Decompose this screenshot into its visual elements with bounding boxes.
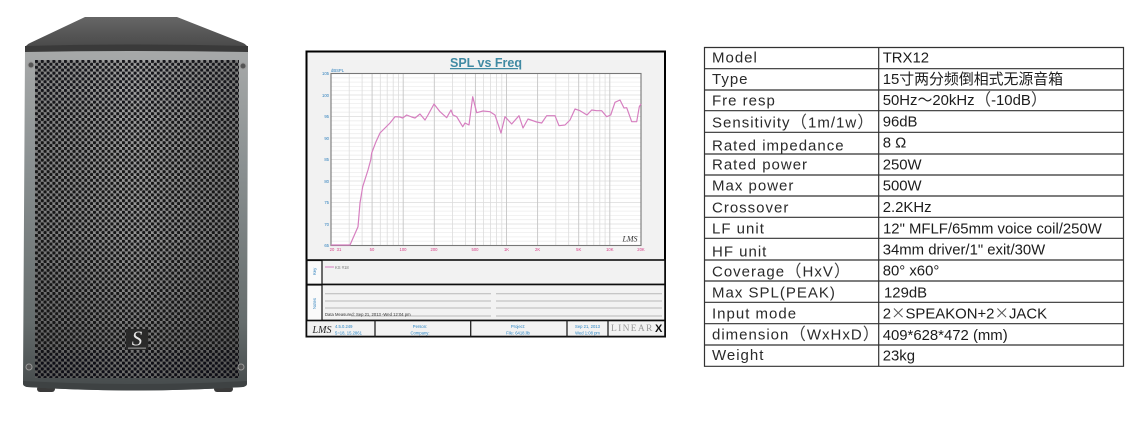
row: frequency response: Fre resp	[712, 93, 776, 110]
row: model: Model	[712, 50, 758, 67]
row: max power: 500W	[883, 179, 922, 195]
row: input mode: Input mode	[712, 305, 797, 322]
y axis labels: 70	[324, 222, 330, 227]
key section: Key	[312, 267, 317, 275]
y axis labels: 85	[324, 157, 330, 162]
y axis labels	[322, 71, 330, 248]
panel: speaker photo	[23, 17, 248, 392]
footer info bar: Company:	[410, 330, 430, 336]
speaker feet	[37, 386, 233, 392]
footer info bar: X	[655, 323, 663, 335]
panel: specification table	[704, 48, 1124, 366]
row: rated impedance	[712, 135, 906, 155]
row: LF unit: 12" MFLF/65mm voice coil/250W	[883, 221, 1102, 237]
row: rated power: Rated power	[712, 156, 808, 173]
y axis labels: 90	[324, 136, 330, 141]
footer info bar: Wed 1:08 pm	[575, 330, 600, 336]
footer info bar: File: 6418.lib	[506, 330, 531, 336]
row: dimension: dimension（WxHxD）	[712, 324, 880, 343]
x axis labels: 200	[430, 247, 438, 252]
x axis labels: 20	[330, 247, 335, 252]
row: model: TRX12	[883, 50, 929, 66]
row: max SPL: 129dB	[884, 285, 927, 301]
row: rated power	[712, 156, 922, 173]
row: crossover	[712, 199, 932, 216]
row: rated impedance: Rated impedance	[712, 138, 845, 155]
row: crossover: 2.2KHz	[883, 200, 932, 216]
row: LF unit: LF unit	[712, 220, 765, 237]
row: rated power: 250W	[883, 157, 922, 173]
row: crossover: Crossover	[712, 199, 789, 216]
row: coverage: 80° x60°	[883, 264, 939, 280]
footer info bar: Person:	[413, 324, 427, 329]
x axis labels: 5K	[576, 247, 581, 252]
row: input mode	[712, 302, 1047, 323]
footer info bar: 4.5.0.249	[335, 324, 353, 329]
bottom band	[23, 381, 247, 390]
metal grille	[35, 60, 239, 378]
panel: SPL vs Freq chart	[306, 52, 665, 336]
frequency response curve	[331, 97, 641, 245]
y axis labels: 80	[324, 179, 330, 184]
key section: KS #18	[335, 265, 349, 270]
row: coverage: Coverage（HxV）	[712, 262, 851, 281]
x axis labels: 10K	[606, 247, 614, 252]
row: frequency response: 50Hz～20kHz（-10dB）	[883, 90, 1047, 109]
row: weight: 23kg	[883, 349, 915, 365]
row: max SPL: Max SPL(PEAK)	[712, 284, 836, 301]
cabinet top surface	[25, 17, 248, 54]
row: model	[712, 50, 929, 67]
row: type: Type	[712, 71, 749, 88]
y axis labels: 65	[324, 243, 330, 248]
table grid	[704, 48, 1124, 366]
notes section: Notes	[312, 298, 317, 309]
top shadow band	[25, 44, 248, 52]
notes section: Data Measured: Sep 21, 2013 -Wed 12:04 pm	[325, 312, 411, 317]
row: type	[712, 71, 1063, 88]
row: max power: Max power	[712, 178, 794, 195]
row: LF unit	[712, 220, 1102, 237]
row: rated impedance: 8 Ω	[883, 135, 906, 151]
key section	[306, 260, 665, 284]
row: HF unit	[712, 242, 1045, 261]
y axis labels: 105	[322, 71, 330, 76]
footer info bar	[306, 320, 665, 336]
x axis labels: 500	[472, 247, 479, 252]
row: frequency response	[712, 90, 1047, 110]
footer info bar: Sep 21, 2013	[575, 324, 601, 329]
notes section	[306, 284, 665, 320]
row: max SPL	[712, 284, 927, 301]
row: sensitivity: 96dB	[883, 115, 918, 131]
brand logo badge	[126, 326, 148, 350]
row: HF unit: 34mm driver/1" exit/30W	[883, 242, 1045, 258]
row: input mode: 2×SPEAKON+2×JACK	[883, 302, 1047, 323]
x axis labels: 100	[400, 247, 407, 252]
x axis labels: 31	[337, 247, 342, 252]
x axis labels: 1K	[504, 247, 509, 252]
LMS mark: LMS	[621, 234, 638, 244]
cabinet front frame	[23, 47, 248, 390]
x axis labels: 20K	[637, 247, 645, 252]
row: dimension: 409*628*472 (mm)	[883, 328, 1008, 344]
y axis labels: 100	[322, 93, 330, 98]
row: coverage	[712, 262, 939, 281]
x axis labels: 2K	[535, 247, 540, 252]
row: sensitivity: Sensitivity（1m/1w）	[712, 113, 875, 132]
row: weight: Weight	[712, 347, 764, 364]
x axis labels: 50	[370, 247, 375, 252]
footer info bar: Project:	[511, 324, 525, 329]
footer info bar: 5~18, 15.2861	[335, 330, 363, 336]
x axis labels	[330, 247, 645, 252]
brand logo badge: S	[132, 326, 143, 350]
chart title: SPL vs Freq	[450, 56, 522, 70]
footer info bar: LMS	[312, 325, 331, 336]
row: weight	[712, 347, 915, 365]
y axis unit: dBSPL	[331, 68, 345, 73]
row: type: 15寸两分频倒相式无源音箱	[883, 71, 1063, 88]
footer info bar: LINEAR	[611, 324, 654, 334]
row: HF unit: HF unit	[712, 244, 767, 261]
chart frame	[306, 52, 665, 336]
y axis labels: 75	[324, 200, 330, 205]
corner screws	[26, 62, 246, 370]
row: dimension	[712, 324, 1008, 344]
plot area	[331, 74, 641, 246]
row: max power	[712, 178, 922, 195]
y axis labels: 95	[324, 114, 330, 119]
